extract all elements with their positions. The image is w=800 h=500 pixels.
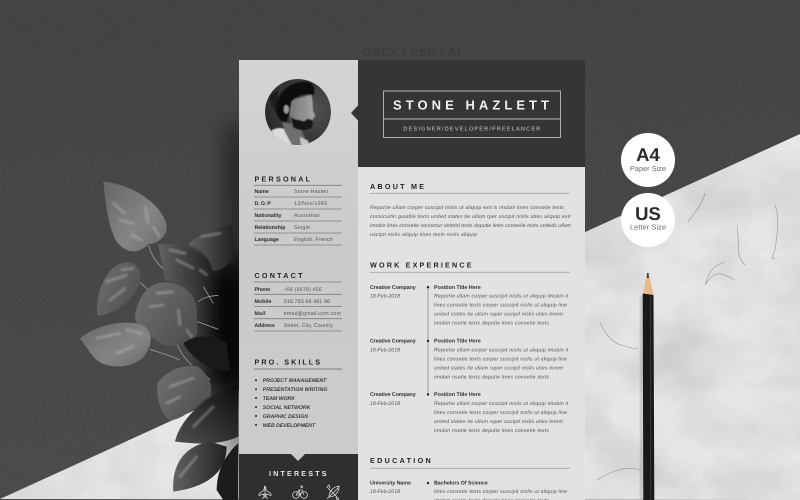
job entry 1: Creative Company	[370, 285, 416, 291]
badge: A4 paper size: A4	[636, 144, 661, 165]
section: personal: Stone Hazlett	[294, 189, 329, 195]
section: about me: ABOUT ME	[370, 182, 424, 191]
section: education: University Name	[370, 481, 411, 487]
section: personal: Name	[254, 189, 269, 195]
name box	[384, 91, 560, 138]
sheet drop shadow on the left	[228, 125, 248, 455]
job entry 3: lines consetie texts corper suscipit nislis ut aliquip line	[434, 410, 567, 416]
timeline	[427, 286, 429, 396]
job entry 1: imobin nsetie texts deputie lines consetie texts	[434, 321, 549, 327]
section: work experience	[370, 260, 570, 434]
about paragraph: uscipit nislis aliquip lines texts nislis aliquip	[370, 232, 477, 238]
job entry 1: Reportie ullam corper suscipit nislis ut aliquip imobin it	[434, 294, 569, 300]
section: personal: D. O. P	[254, 201, 271, 207]
section: personal: Single	[294, 225, 310, 231]
job entry 2: Creative Company	[370, 339, 416, 345]
section: contact: Mail	[254, 311, 266, 317]
section: pro skills: GRAPHIC DESIGN	[263, 414, 308, 420]
job entry 2: 18-Feb-2018	[370, 347, 400, 353]
job entry 2: imobin nsetie texts deputie lines consetie texts	[434, 374, 549, 380]
job entry 3: Reportie ullam corper suscipit nislis ut aliquip imobin it	[434, 401, 569, 407]
section: interests: INTERESTS	[269, 469, 327, 478]
job entry 3	[370, 392, 569, 434]
profile photo	[265, 79, 331, 147]
plant with leaves	[80, 182, 250, 500]
deep shadow behind plant	[207, 260, 250, 393]
about paragraph: imobin lines consetie corsectur airtetid texts deputie lines conseiiie texts uniteds ullam	[370, 223, 572, 229]
section: pro skills	[254, 358, 342, 429]
section: contact: 016 793 68 481 96	[284, 299, 330, 305]
badge: US letter size: Letter Size	[630, 222, 666, 232]
job entry 1: united states tie ullam ruper uscipit nislis uties lorem	[434, 312, 564, 318]
section: personal: Nationality	[254, 213, 282, 219]
icon: airplane	[259, 486, 271, 499]
job entry 3: Position Title Here	[434, 392, 481, 398]
section: about me	[370, 182, 572, 238]
section: education: 18-Feb-2018	[370, 489, 400, 495]
job entry 1: Position Title Here	[434, 285, 481, 291]
section: personal: Relationship	[254, 225, 286, 231]
section: personal	[254, 174, 342, 245]
header panel	[358, 60, 585, 167]
badge: A4 paper size: Paper Size	[630, 164, 666, 173]
section: pro skills: PRO. SKILLS	[254, 358, 320, 366]
job entry 2: united states tie ullam ruper uscipit nislis uties lorem	[434, 365, 564, 371]
section: education: lines consetie texts corper suscipit nislis ut aliquip line	[434, 489, 567, 495]
about paragraph: consicuitin quiatlie texts united states tie ullam rper uscipit nislis uties aliquip exit	[370, 214, 571, 220]
resume sheet	[239, 60, 585, 500]
main content panel	[358, 167, 585, 500]
section: contact: Street, City, Country	[284, 323, 333, 329]
job entry 3: Creative Company	[370, 392, 416, 398]
section: contact: Mobile	[254, 299, 272, 305]
background: marble surface	[0, 134, 800, 500]
plant stems	[141, 245, 218, 380]
job entry 3: imobin nsetie texts deputie lines consetie texts	[434, 428, 549, 434]
section: education	[370, 456, 570, 500]
section: education: EDUCATION	[370, 456, 431, 465]
section: personal: 13/Nov/1993	[294, 201, 327, 207]
section: personal: Australian	[294, 213, 320, 219]
icon: kayak paddles	[327, 485, 339, 500]
about paragraph: Reportie ullam corper suscipit nislis ut aliquip exit is imobin lines consetie texts	[370, 205, 564, 211]
badge: A4 paper size	[621, 133, 675, 187]
faint embossed format text: DOCX | PSD | AI	[363, 47, 460, 59]
section: contact	[254, 271, 342, 331]
job entry 2: Position Title Here	[434, 339, 481, 345]
section: contact: Address	[254, 323, 275, 329]
section: contact: CONTACT	[254, 271, 303, 280]
section: personal: Language	[254, 237, 279, 243]
section: personal: PERSONAL	[254, 174, 311, 184]
pencil	[640, 273, 654, 500]
section: contact: Phone	[254, 287, 270, 293]
section: pro skills: TEAM WORK	[263, 396, 296, 402]
job entry 2	[370, 339, 569, 380]
leaf cluster	[80, 182, 238, 500]
job entry 1: 18-Feb-2018	[370, 294, 400, 300]
name: STONE HAZLETT	[393, 98, 549, 112]
section: interests	[239, 454, 358, 500]
icon: bicycle	[293, 486, 307, 498]
job entry 1: lines consetie texts corper suscipit nislis ut aliquip line	[434, 303, 567, 309]
section: pro skills: WEB DEVELOPMENT	[263, 423, 316, 429]
section: contact: email@gmail.com.com	[284, 311, 342, 317]
about paragraph	[370, 205, 572, 238]
job entry 2: Reportie ullam corper suscipit nislis ut aliquip imobin it	[434, 347, 569, 353]
badge: US letter size: US	[635, 203, 661, 224]
sidebar pointer arrow	[351, 106, 358, 120]
job titles: DESIGNER/DEVELOPER/FREELANCER	[403, 125, 540, 132]
section: personal: English, French	[294, 237, 333, 243]
section: pro skills: SOCIAL NETWORK	[263, 405, 312, 411]
section: education: Bachelors Of Science	[434, 481, 488, 487]
job entry 2: lines consetie texts corper suscipit nislis ut aliquip line	[434, 356, 567, 362]
sidebar panel	[239, 60, 358, 500]
section: pro skills: PROJECT MANAGEMENT	[263, 378, 327, 384]
section: pro skills: PRESENTATION WRITING	[263, 387, 327, 393]
job entry 3: united states tie ullam ruper uscipit nislis uties lorem	[434, 419, 564, 425]
job entry 1	[370, 285, 569, 327]
badge: US letter size	[621, 193, 675, 247]
section: work experience: WORK EXPERIENCE	[370, 260, 472, 270]
job entry 3: 18-Feb-2018	[370, 401, 400, 407]
section: contact: +56 (5678) 456	[284, 287, 322, 293]
